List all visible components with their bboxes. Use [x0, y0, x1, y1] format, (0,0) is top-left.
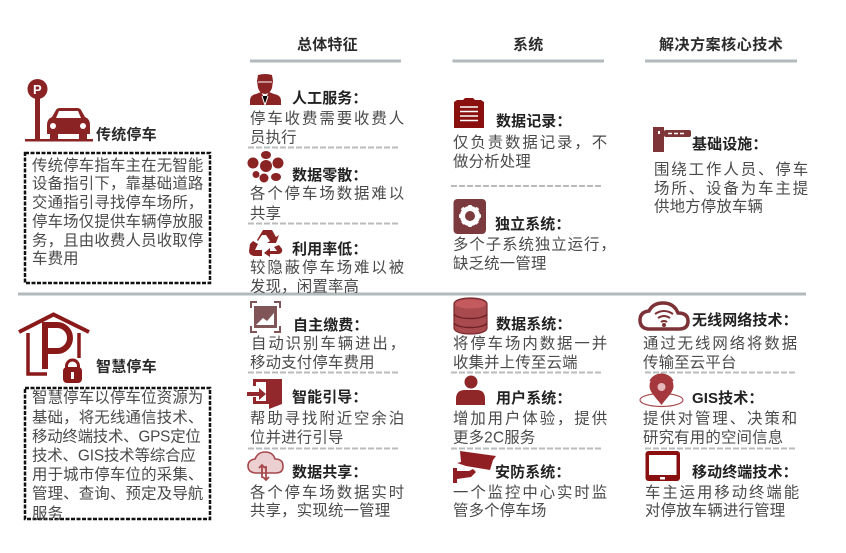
text box: smart parking description	[25, 388, 210, 522]
item: 自主缴费	[250, 302, 407, 372]
item: 安防系统: 一个监控中心实时监	[453, 484, 609, 502]
item: 无线网络技术	[640, 303, 799, 372]
text box: smart parking description: 管理、查询、预定及导航	[32, 484, 204, 502]
item: 基础设施: 场所、设备为车主提	[654, 180, 810, 198]
panel: smart parking	[19, 314, 210, 522]
item: 利用率低: 发现，闲置率高	[250, 278, 359, 296]
item: 独立系统: 缺乏统一管理	[453, 254, 547, 272]
item: 独立系统	[453, 199, 616, 272]
item: 移动终端技术: 移动终端技术：	[692, 463, 798, 481]
item: GIS技术: 研究有用的空间信息	[643, 428, 783, 446]
heading: 传统停车: 传统停车	[96, 126, 157, 144]
item: 智能引导: 帮助寻找附近空余泊	[250, 408, 406, 428]
item: 安防系统	[453, 451, 609, 520]
item: 人工服务: 停车收费需要收费人	[250, 110, 406, 128]
item: 数据零散	[248, 151, 406, 222]
column heading: 总体特征: 总体特征	[297, 36, 358, 54]
item: 数据共享: 数据共享：	[292, 463, 368, 481]
item: 用户系统: 更多2C服务	[453, 428, 535, 446]
item: 数据记录: 数据记录：	[496, 112, 572, 130]
item: 人工服务: 人工服务：	[292, 89, 368, 107]
icon: cloud transfer	[248, 452, 283, 480]
icon: document list	[454, 98, 484, 128]
text box: traditional parking description: 务，且由收费人员收取停	[32, 232, 204, 250]
icon: user	[456, 376, 485, 405]
item: GIS技术: 提供对管理、决策和	[643, 410, 799, 428]
item: 数据零散: 数据零散：	[292, 166, 368, 184]
icon: cloud wifi	[640, 303, 688, 329]
icon: security camera	[453, 451, 496, 483]
item: 基础设施: 基础设施：	[692, 135, 768, 153]
column heading: 系统: 系统	[513, 36, 543, 54]
item: 数据系统: 收集并上传至云端	[453, 354, 578, 372]
text box: traditional parking description: 车费用	[32, 250, 79, 268]
item: 数据共享	[248, 452, 406, 520]
item: 数据共享: 各个停车场数据实时	[250, 484, 406, 502]
item: 自主缴费: 自动识别车辆进出，	[251, 334, 407, 352]
column heading: 解决方案核心技术: 解决方案核心技术	[659, 36, 783, 54]
item: 基础设施	[653, 127, 810, 216]
item: 独立系统: 多个子系统独立运行，	[453, 236, 616, 254]
text box: traditional parking description: 传统停车指车主在无智能	[32, 156, 204, 174]
text box: smart parking description: 基础，将无线通信技术、	[32, 408, 204, 426]
item: 安防系统: 安防系统：	[495, 463, 571, 481]
item: 移动终端技术: 车主运用移动终端能	[645, 484, 801, 502]
text box: traditional parking description: 交通指引寻找停车场所，	[32, 194, 204, 212]
item: 移动终端技术	[645, 451, 801, 520]
text box: traditional parking description: 设备指引下，靠基础道路	[32, 174, 204, 192]
text box: smart parking description: 服务	[32, 504, 63, 522]
item: 利用率低: 利用率低：	[292, 240, 368, 258]
icon: parking sign and car	[25, 79, 93, 142]
item: 智能引导: 智能引导：	[292, 388, 368, 406]
item: 基础设施: 供地方停放车辆	[654, 198, 763, 216]
item: 智能引导	[247, 379, 406, 446]
item: 无线网络技术: 传输至云平台	[643, 354, 737, 372]
item: 独立系统: 独立系统：	[495, 215, 571, 233]
text box: traditional parking description	[25, 153, 210, 283]
item: 移动终端技术: 对停放车辆进行管理	[645, 502, 785, 520]
item: GIS技术: GIS技术：	[692, 389, 763, 407]
icon: recycle arrows	[249, 230, 282, 257]
item: 数据零散: 共享	[250, 204, 281, 222]
item: 自主缴费: 移动支付停车费用	[250, 354, 375, 372]
item: 人工服务	[250, 74, 406, 146]
icon: map pin	[640, 374, 683, 406]
item: 基础设施: 围绕工作人员、停车	[654, 160, 810, 178]
icon: door with arrow	[247, 379, 282, 409]
item: 数据系统: 数据系统：	[496, 315, 572, 333]
icon: staff person	[250, 74, 281, 105]
icon: database	[454, 298, 487, 334]
icon: scattered dots	[248, 151, 284, 182]
text box: smart parking description: 用于城市停车位的采集、	[32, 466, 204, 484]
item: 自主缴费: 自主缴费：	[293, 316, 369, 334]
text box: smart parking description: 智慧停车以停车位资源为	[32, 388, 204, 406]
item: 数据共享: 共享，实现统一管理	[250, 502, 390, 520]
item: 利用率低: 较隐蔽停车场难以被	[250, 258, 406, 276]
icon: tablet	[646, 451, 680, 481]
item: 数据零散: 各个停车场数据难以	[250, 184, 406, 202]
item: 智能引导: 位并进行引导	[250, 428, 344, 446]
heading: 智慧停车: 智慧停车	[96, 358, 157, 376]
icon: parking sign and car: P	[33, 82, 42, 97]
icon: house with P and lock	[19, 314, 89, 383]
item: 用户系统: 用户系统：	[496, 389, 572, 407]
text box: smart parking description: 移动终端技术、GPS定位	[32, 428, 201, 446]
item: 数据系统: 将停车场内数据一并	[453, 334, 609, 352]
item: 数据记录: 做分析处理	[453, 152, 531, 170]
item: 安防系统: 管多个停车场	[453, 502, 547, 520]
item: 数据记录	[453, 98, 609, 170]
panel: traditional parking	[25, 79, 210, 283]
icon: parking barrier	[653, 127, 691, 152]
text box: smart parking description: 技术、GIS技术等综合应	[32, 446, 196, 464]
text box: traditional parking description: 停车场仅提供车辆停放服	[32, 212, 204, 230]
item: 人工服务: 员执行	[250, 128, 297, 146]
item: 利用率低	[249, 230, 406, 296]
item: 无线网络技术: 无线网络技术：	[692, 311, 798, 329]
item: 无线网络技术: 通过无线网络将数据	[643, 334, 799, 352]
icon: framed picture	[251, 302, 280, 332]
item: GIS技术	[640, 374, 799, 446]
icon: gear tile	[454, 199, 486, 234]
item: 用户系统	[453, 376, 609, 446]
item: 数据记录: 仅负责数据记录，不	[453, 134, 609, 152]
item: 用户系统: 增加用户体验，提供	[453, 410, 609, 428]
item: 数据系统	[453, 298, 609, 372]
